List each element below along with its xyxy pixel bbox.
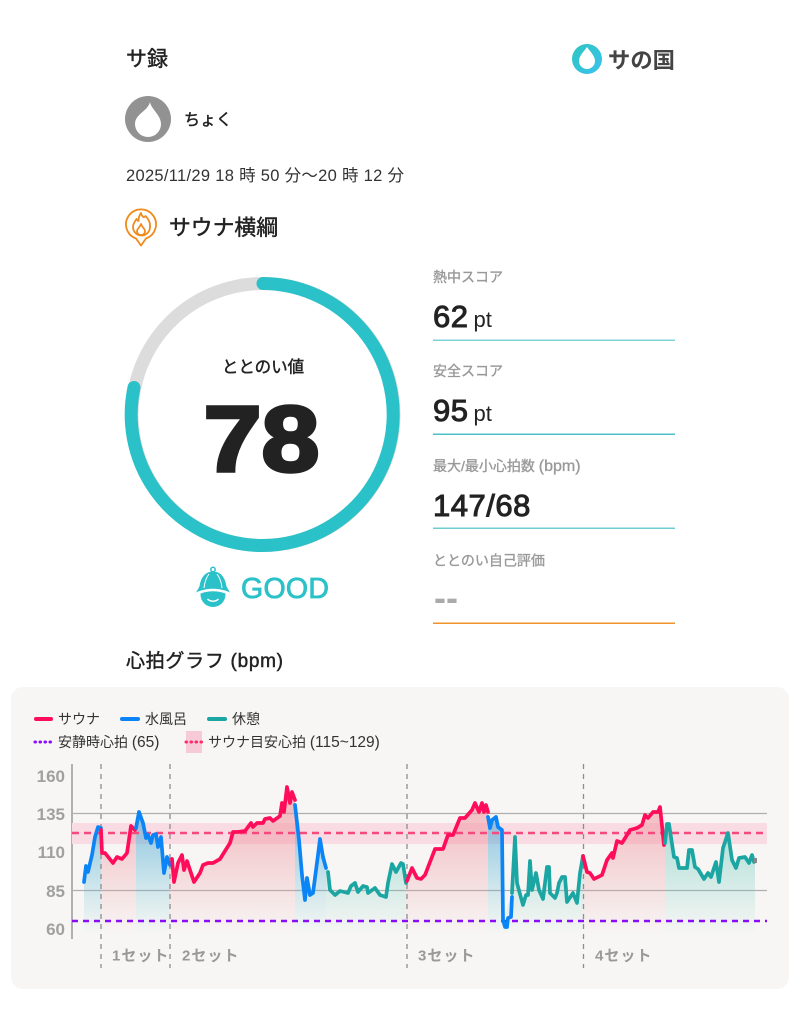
target heart-rate line bbox=[72, 832, 767, 834]
stat: heat score: 熱中スコア bbox=[433, 269, 503, 285]
heart rate line bbox=[84, 787, 757, 927]
rating label: GOOD bbox=[241, 573, 329, 605]
panel: heart rate chart bbox=[11, 687, 789, 989]
y axis: 60 bbox=[46, 920, 65, 939]
gauge: totonoi score ring bbox=[131, 284, 394, 546]
rating: GOOD bbox=[196, 567, 329, 607]
set dividers bbox=[101, 764, 584, 968]
legend: 休憩 bbox=[232, 711, 260, 727]
resting heart-rate line bbox=[72, 920, 767, 922]
icon: logo drop bbox=[572, 44, 602, 74]
y axis: 110 bbox=[38, 843, 65, 862]
legend: サウナ目安心拍 (115~129) bbox=[208, 734, 380, 751]
stat: max/min heart rate: 147/68 bbox=[433, 488, 531, 523]
stat: safety score bbox=[433, 363, 675, 435]
stat: safety score: 安全スコア bbox=[433, 363, 503, 379]
stat: heat score: 62pt bbox=[433, 299, 492, 334]
logo wordmark: サの国 bbox=[608, 48, 675, 73]
chart heading: 心拍グラフ (bpm) bbox=[126, 650, 283, 672]
stat: safety score: 95pt bbox=[433, 393, 492, 428]
logo: サの国 bbox=[572, 44, 675, 74]
y axis bbox=[37, 764, 72, 939]
stat: max/min heart rate bbox=[433, 458, 675, 529]
legend bbox=[35, 711, 380, 753]
gauge label: ととのい値 bbox=[222, 358, 304, 376]
icon: sauna hat face bbox=[196, 567, 230, 607]
y axis: 160 bbox=[37, 767, 65, 786]
icon: flame badge bbox=[126, 209, 156, 246]
y axis: 85 bbox=[46, 882, 65, 901]
legend: サウナ bbox=[58, 711, 100, 727]
grid lines bbox=[72, 814, 767, 890]
set labels: 3セット bbox=[418, 948, 475, 964]
legend: 安静時心拍 (65) bbox=[58, 734, 159, 751]
set labels: 4セット bbox=[595, 948, 652, 964]
set labels: 1セット bbox=[112, 948, 169, 964]
title: サ録 bbox=[126, 48, 168, 71]
set labels bbox=[112, 948, 652, 964]
area fills bbox=[84, 787, 755, 936]
gauge value: 78 bbox=[204, 387, 319, 491]
stat: heat score bbox=[433, 269, 675, 341]
icon: user avatar bbox=[125, 96, 171, 142]
stat: self rating: ととのい自己評価 bbox=[433, 552, 545, 568]
user name: ちょく bbox=[184, 112, 232, 129]
stat: max/min heart rate: 最大/最小心拍数 (bpm) bbox=[433, 458, 581, 475]
target heart-rate band bbox=[72, 823, 767, 844]
stat: self rating bbox=[433, 552, 675, 624]
stat: self rating: -- bbox=[434, 577, 458, 618]
rank heading: サウナ横綱 bbox=[169, 215, 278, 240]
legend: 水風呂 bbox=[145, 711, 187, 727]
y axis: 135 bbox=[37, 805, 65, 824]
date and time: 2025/11/29 18 時 50 分〜20 時 12 分 bbox=[126, 166, 404, 185]
set labels: 2セット bbox=[182, 948, 239, 964]
